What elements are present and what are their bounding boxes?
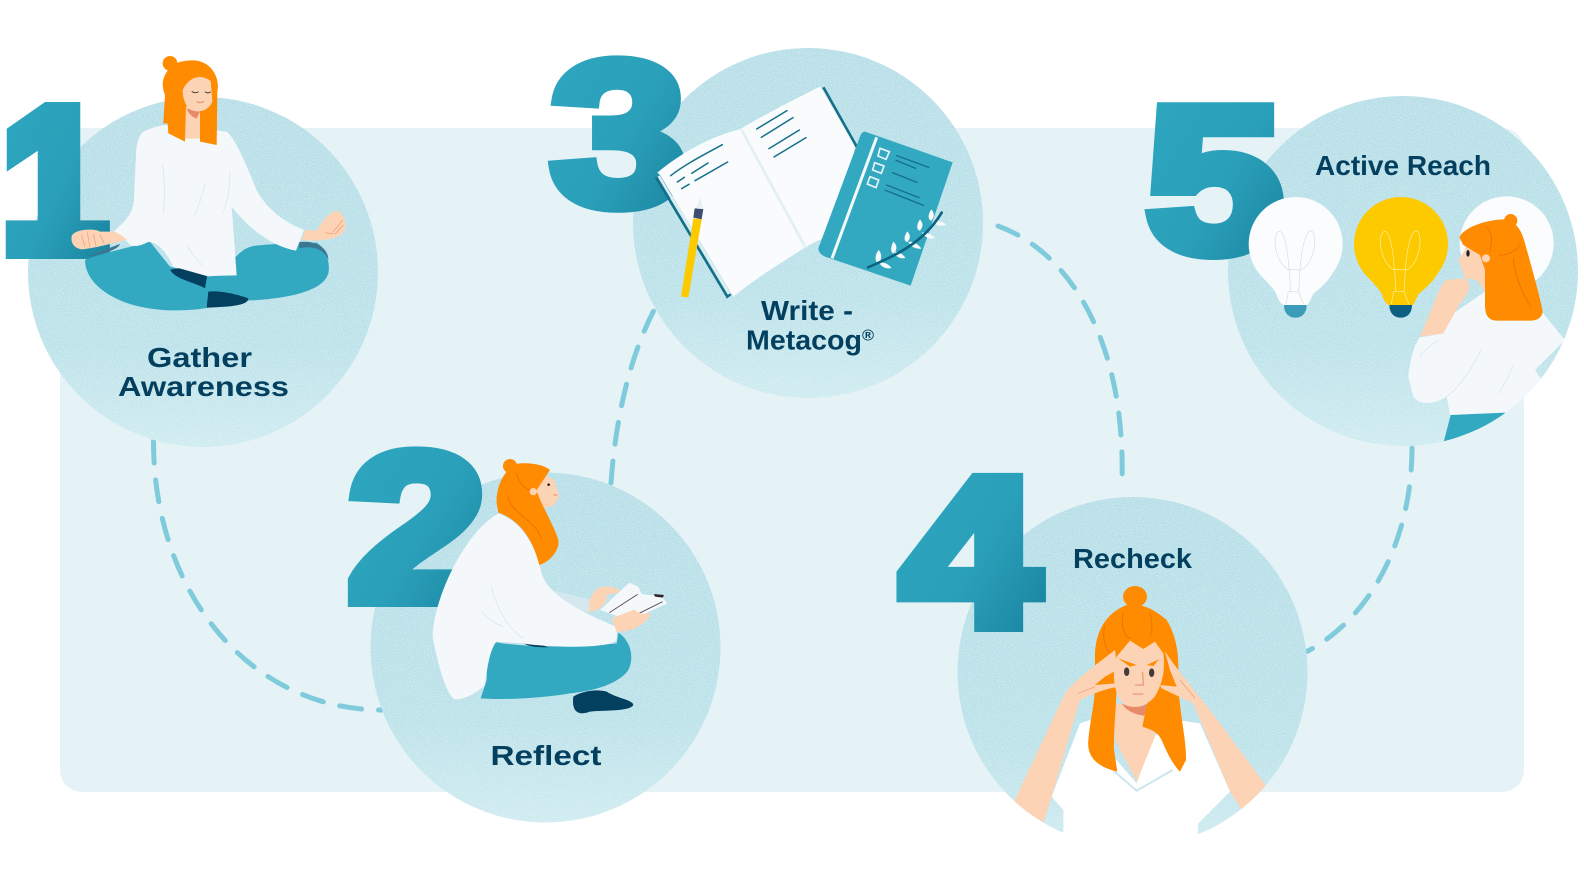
ear	[1482, 254, 1490, 262]
illustration: notebooks and pencil	[656, 87, 953, 297]
sweater creases	[1420, 340, 1513, 397]
panel: step 1 circle	[28, 97, 378, 447]
tablet clip	[654, 594, 664, 598]
number 4: 4	[901, 434, 1039, 670]
right arm	[1160, 652, 1267, 810]
eyes and mouth	[192, 91, 211, 93]
hair bun	[1504, 214, 1518, 225]
panel: step 4 circle	[958, 497, 1308, 847]
right page text lines	[757, 111, 806, 157]
shoe	[573, 690, 633, 713]
nose and mouth	[1133, 672, 1143, 694]
label: Write - Metacog: Write -	[761, 295, 853, 326]
sweater	[433, 513, 617, 699]
pants	[1443, 413, 1505, 443]
branch	[868, 213, 942, 267]
label: Active Reach: Active Reach	[1315, 150, 1491, 181]
sweater	[113, 125, 304, 276]
left arm	[1013, 650, 1117, 823]
third bulb	[1460, 196, 1554, 290]
neck	[1113, 703, 1155, 782]
left page text lines	[671, 145, 728, 189]
hair left lock	[1088, 683, 1117, 772]
sweater creases	[482, 587, 523, 638]
hair back	[1094, 604, 1178, 684]
panel: step 2 circle	[370, 472, 720, 822]
right fingers	[325, 220, 343, 234]
background panel	[60, 128, 1524, 792]
label: Write - Metacog: Metacog	[746, 324, 860, 356]
upper hand	[589, 586, 621, 612]
socks	[170, 268, 248, 308]
lower hand	[612, 609, 652, 632]
right page	[740, 87, 855, 247]
notebook text lines	[885, 156, 929, 205]
face	[1114, 641, 1164, 707]
teal notebook	[818, 132, 953, 286]
eyes	[1124, 667, 1129, 676]
dashed connector: step 4 to 5	[1307, 448, 1412, 652]
label: Gather Awareness: Awareness	[118, 371, 289, 402]
hair right lock	[1142, 667, 1186, 772]
number 1: 1	[2, 68, 107, 293]
label: Recheck: Recheck	[1073, 543, 1192, 574]
shirt	[1052, 720, 1230, 857]
hair strands	[1104, 613, 1152, 653]
eye	[547, 483, 550, 486]
inner sleeve	[543, 588, 589, 612]
book spine	[742, 130, 805, 247]
mouth	[553, 493, 557, 496]
right hand	[302, 211, 345, 240]
tablet lines	[609, 594, 663, 619]
arm and hand	[1420, 278, 1469, 337]
hair bun	[163, 56, 177, 71]
label: Gather Awareness: Gather	[147, 342, 252, 373]
leg shadows	[86, 242, 328, 260]
collar shadow	[1113, 770, 1173, 791]
page edges	[659, 89, 853, 294]
face	[1458, 246, 1485, 292]
neck shadow	[187, 108, 200, 119]
left hand	[71, 230, 127, 249]
pencil	[681, 218, 702, 297]
label: Write - Metacog: ®	[862, 328, 874, 344]
hair strands	[508, 473, 542, 540]
tablet	[600, 583, 667, 621]
label: Reflect: Reflect	[490, 740, 602, 771]
eyebrows	[1118, 658, 1159, 667]
sweater creases	[162, 165, 230, 267]
waist	[522, 640, 548, 647]
legs	[85, 242, 329, 310]
left page	[657, 129, 807, 297]
illustration: stressed woman	[1013, 586, 1267, 857]
sweater	[1408, 292, 1565, 420]
finger lines	[1078, 680, 1195, 698]
notebook strip	[832, 137, 877, 258]
dashed connector: step 1 to 2	[154, 441, 382, 710]
number 5: 5	[1147, 64, 1282, 295]
left fingers	[82, 233, 104, 247]
panel: step 5 circle	[1228, 96, 1578, 446]
checkboxes	[867, 148, 889, 188]
hair	[163, 60, 218, 145]
face	[533, 477, 559, 508]
number 3: 3	[550, 19, 687, 248]
hair	[497, 463, 559, 565]
panel: step 3 circle	[633, 48, 983, 398]
neck	[185, 107, 200, 139]
illustration: meditating woman	[71, 56, 345, 310]
pencil ferrule	[693, 208, 703, 219]
pencil tip	[695, 197, 703, 209]
illustration: light bulbs and thinking woman	[1249, 196, 1565, 443]
ear	[530, 488, 537, 495]
hair bun	[1123, 586, 1147, 607]
illustration: reflecting woman	[433, 459, 667, 713]
hair strands	[1487, 227, 1531, 307]
dashed connector: step 3 to 4	[998, 226, 1122, 483]
hair fringe	[172, 69, 213, 90]
eye	[1466, 250, 1470, 257]
dashed connector: step 2 to 3	[611, 309, 655, 483]
pants	[481, 633, 631, 699]
label: Write - Metacog	[746, 295, 874, 356]
label: Gather Awareness	[118, 342, 289, 402]
hair bun	[503, 459, 517, 473]
neck shadow	[1122, 704, 1148, 716]
hair	[1459, 219, 1543, 321]
face	[183, 76, 212, 111]
leaves	[876, 209, 946, 268]
white bulb	[1249, 197, 1343, 318]
yellow bulb	[1354, 197, 1448, 318]
book cover edges	[656, 87, 857, 297]
number 2: 2	[348, 410, 486, 645]
